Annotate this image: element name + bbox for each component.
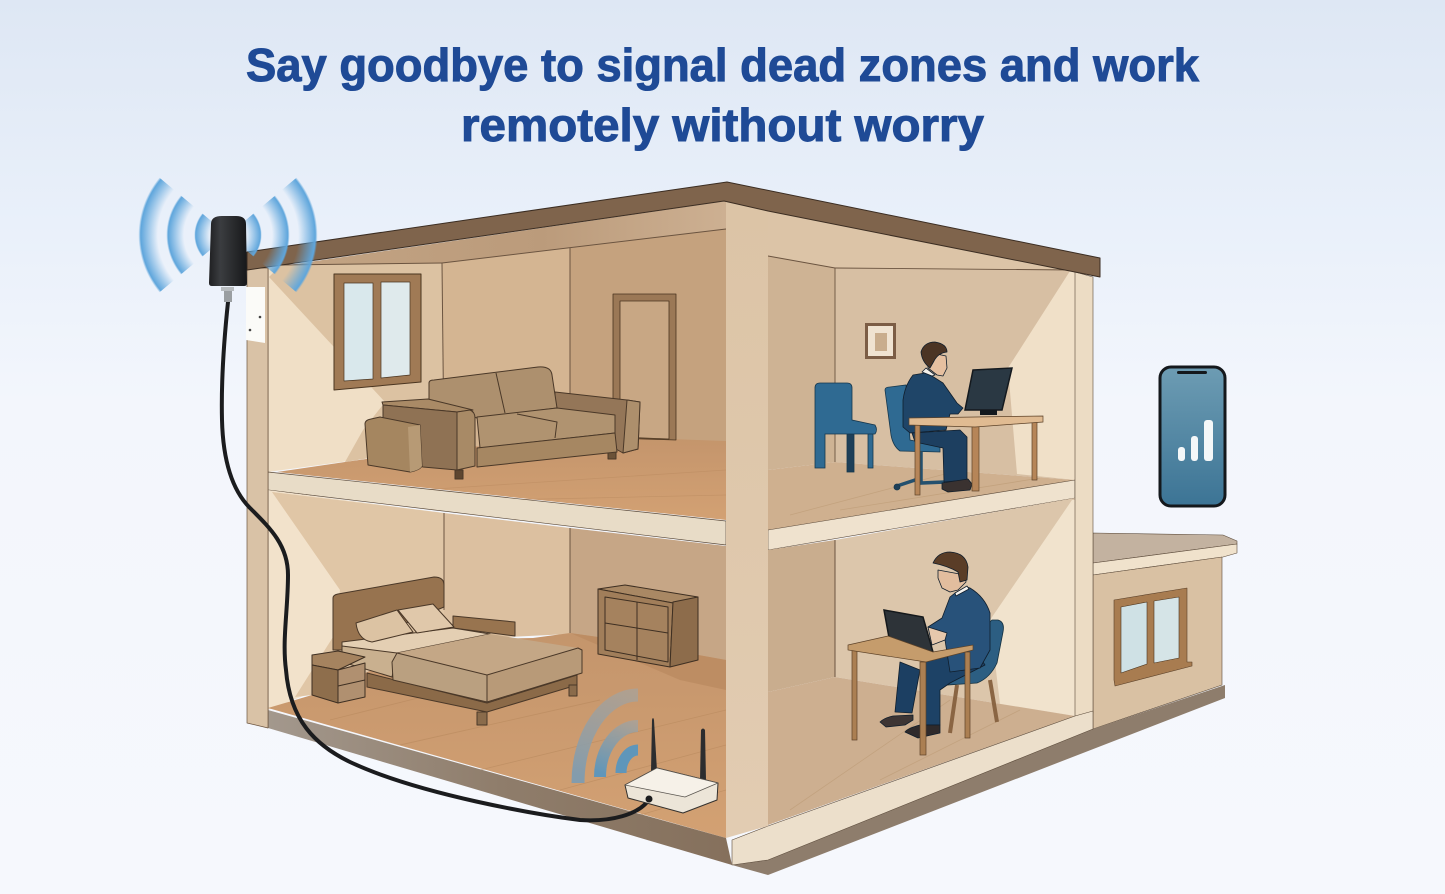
signal waves: [118, 143, 338, 327]
person: [880, 552, 990, 738]
person: [903, 342, 972, 492]
laptop: [884, 610, 933, 652]
cable plug: [646, 796, 652, 802]
antenna: [209, 216, 247, 302]
signal bars: [1178, 420, 1213, 461]
wall picture: [865, 323, 896, 359]
router: [625, 718, 718, 813]
router signal: [578, 695, 638, 783]
roof: [247, 182, 1100, 277]
upper-right room: [768, 210, 1075, 550]
chair: [947, 620, 1003, 733]
title: remotely without worry: [461, 99, 984, 151]
upper-left window: [334, 274, 421, 390]
lower-right room: [768, 498, 1075, 825]
phone icon: [1160, 367, 1225, 506]
house cutaway: [247, 182, 1237, 875]
mounting plate: [246, 287, 265, 343]
left outer wall: [247, 268, 268, 728]
desk: [909, 416, 1043, 495]
bed: [333, 577, 582, 725]
annex building: [732, 533, 1237, 875]
title: [246, 39, 1199, 151]
office chair: [885, 385, 945, 490]
monitor: [965, 368, 1012, 415]
upper person at desk: [815, 342, 1043, 495]
lower-left room: [268, 490, 732, 865]
title: Say goodbye to signal dead zones and work: [246, 39, 1199, 91]
nightstand: [312, 651, 365, 703]
central pillar: [726, 201, 768, 838]
desk: [848, 636, 973, 755]
upper-left room: [268, 201, 726, 545]
door: [613, 294, 676, 440]
lower person at laptop: [848, 552, 1003, 755]
sofa: [365, 367, 640, 479]
cable: [222, 302, 650, 820]
visitor chair: [815, 383, 876, 472]
dresser: [598, 585, 698, 667]
right outer wall: [732, 272, 1093, 865]
